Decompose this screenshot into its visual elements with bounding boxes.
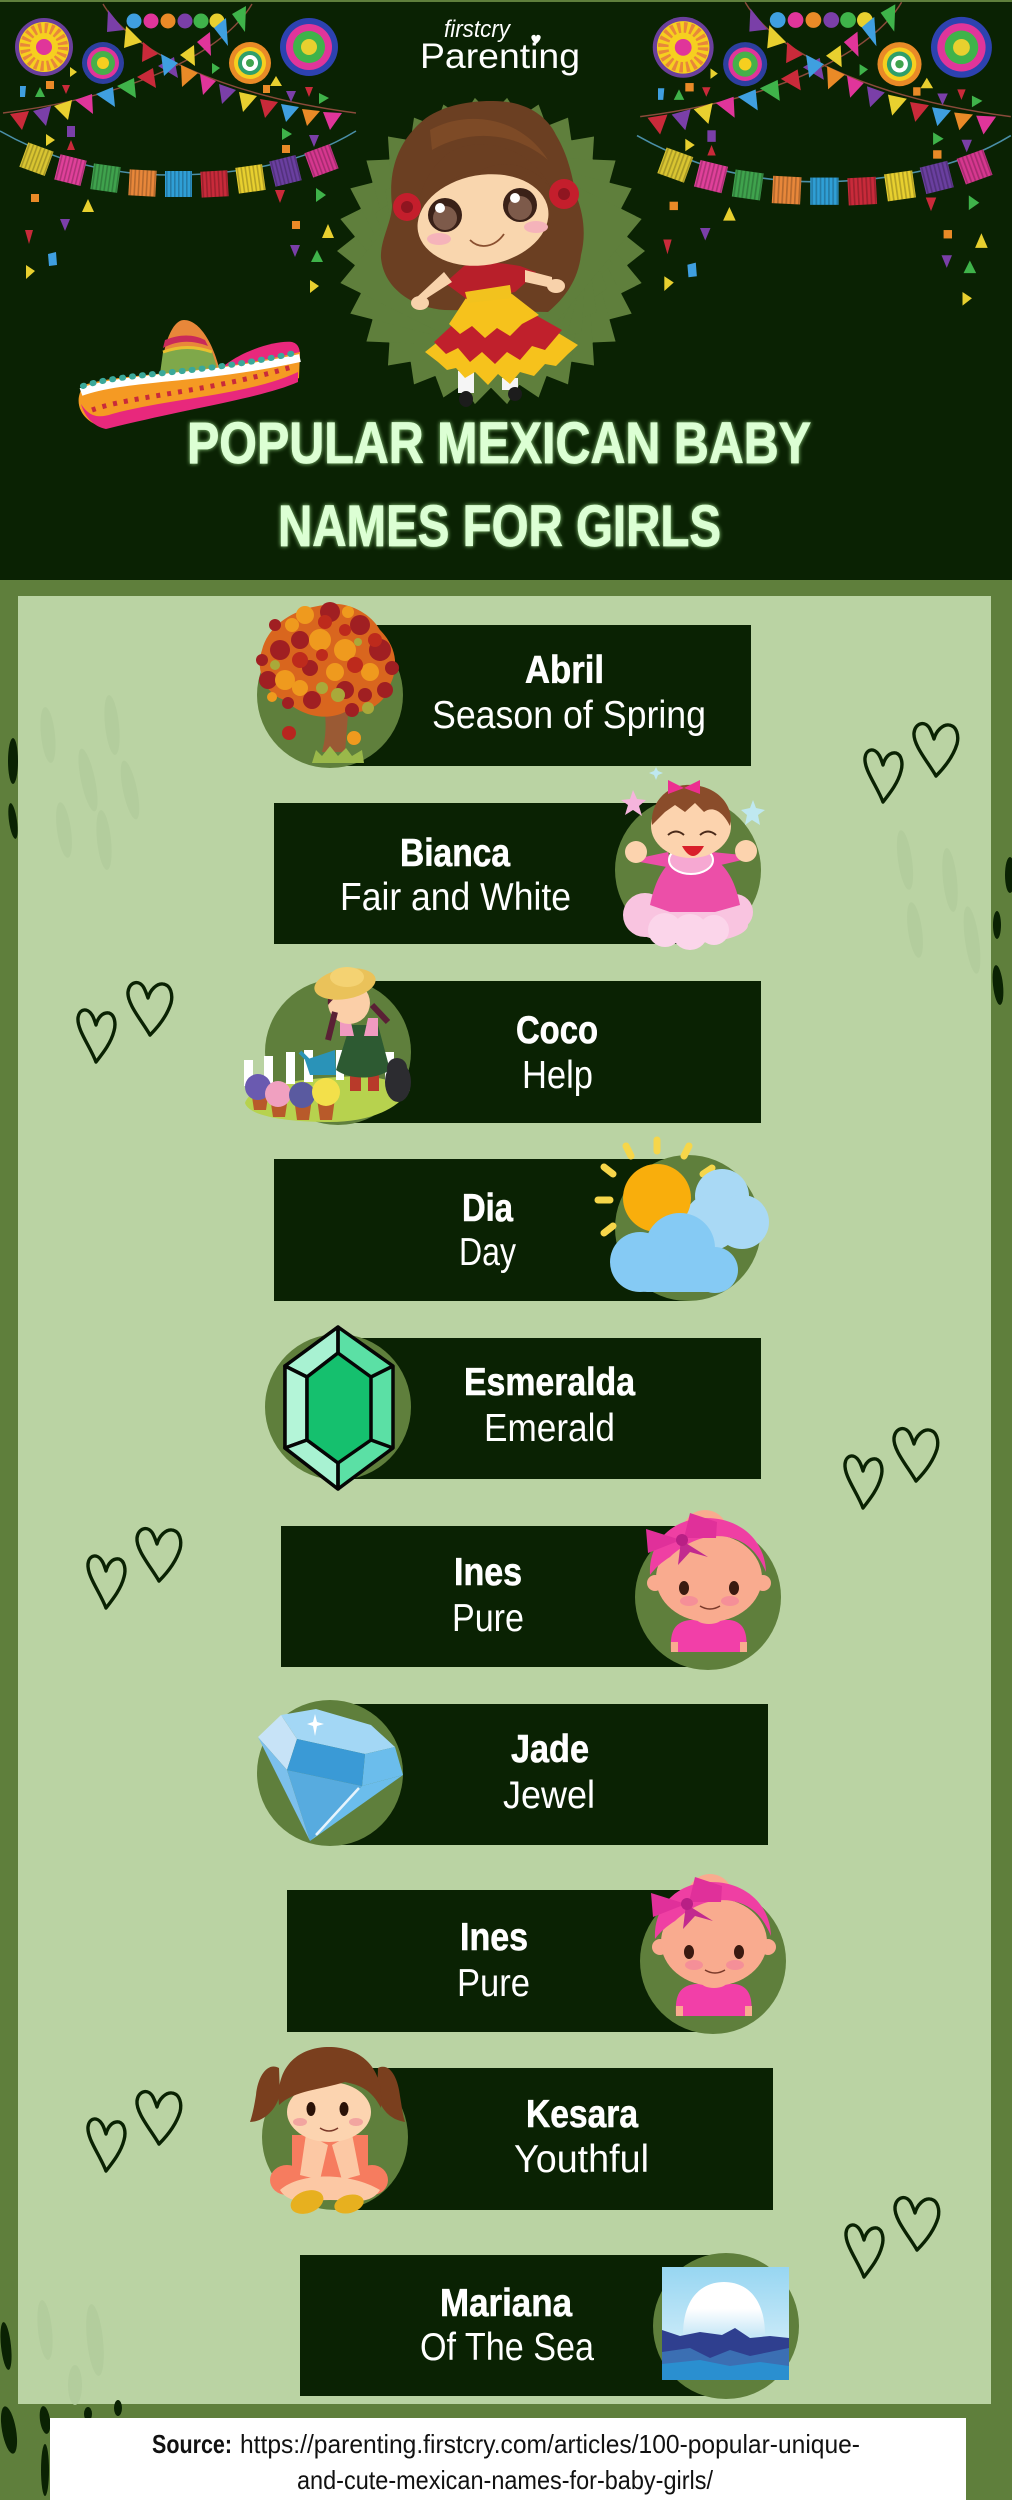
hearts xyxy=(846,2225,883,2277)
meaning text: Pure xyxy=(457,1962,530,2005)
hearts xyxy=(88,2119,125,2171)
meaning text: Day xyxy=(459,1231,516,1274)
papel picado xyxy=(19,142,339,198)
icon: sun and clouds xyxy=(598,1140,769,1293)
row 10: Mariana xyxy=(300,2253,799,2399)
row 6: Ines xyxy=(281,1510,781,1670)
header panel xyxy=(0,2,1012,580)
logo: Parenting xyxy=(420,37,580,76)
meaning text: Youthful xyxy=(514,2138,649,2181)
meaning text: Fair and White xyxy=(340,876,571,919)
logo xyxy=(420,16,580,76)
icon: moon over sea xyxy=(662,2267,789,2380)
hearts xyxy=(895,2198,939,2250)
name text: Dia xyxy=(462,1187,513,1230)
meaning text: Of The Sea xyxy=(420,2326,594,2369)
icon: blue jewel xyxy=(258,1709,403,1841)
icon: baby on pink cloud xyxy=(621,767,765,950)
hearts xyxy=(894,1429,938,1481)
title: NAMES FOR GIRLS xyxy=(278,494,721,559)
bunting flags, string 2 xyxy=(107,10,124,32)
bunting flags, string 1 xyxy=(10,111,29,130)
row 1: Abril xyxy=(256,602,751,768)
hearts xyxy=(137,1529,181,1581)
decorative strokes xyxy=(35,694,984,2405)
meaning text: Help xyxy=(522,1054,593,1097)
festive decoration: right xyxy=(637,2,1011,306)
icon: girl gardening xyxy=(244,964,411,1122)
hearts xyxy=(78,1010,115,1062)
icon: autumn tree xyxy=(256,602,399,763)
title: POPULAR MEXICAN BABY xyxy=(187,411,811,476)
starburst badge xyxy=(295,55,687,447)
illustration: girl in Mexican dress xyxy=(381,101,584,407)
festive decoration: left xyxy=(0,4,356,293)
confetti xyxy=(20,86,26,97)
hearts xyxy=(845,1456,882,1508)
hearts xyxy=(137,2092,181,2144)
title xyxy=(187,411,811,559)
source box: https://parenting.firstcry.com/articles/100-popular-unique- xyxy=(240,2429,860,2459)
meaning text: Emerald xyxy=(484,1407,615,1450)
source box xyxy=(50,2418,966,2500)
meaning text: Season of Spring xyxy=(432,694,706,737)
meaning text: Pure xyxy=(452,1597,524,1640)
row 3: Coco xyxy=(244,964,761,1125)
row 4: Dia xyxy=(274,1140,769,1301)
icon: baby with pink bow xyxy=(651,1874,776,2016)
row 9: Kesara xyxy=(250,2047,773,2218)
icon: sitting girl xyxy=(250,2047,405,2218)
source box: and-cute-mexican-names-for-baby-girls/ xyxy=(297,2465,714,2495)
hearts xyxy=(865,724,958,802)
name text: Abril xyxy=(525,649,604,692)
name text: Jade xyxy=(511,1728,589,1771)
name text: Coco xyxy=(516,1009,598,1052)
logo: firstcry xyxy=(444,16,512,43)
row 5: Esmeralda xyxy=(265,1327,761,1489)
beads xyxy=(126,14,142,28)
hearts xyxy=(88,1556,125,1608)
meaning text: Jewel xyxy=(503,1774,595,1817)
row 7: Jade xyxy=(257,1700,768,1846)
source box: Source: xyxy=(152,2429,232,2459)
name text: Esmeralda xyxy=(464,1361,635,1404)
main light green panel xyxy=(18,596,991,2404)
name text: Kesara xyxy=(526,2093,638,2136)
row 2: Bianca xyxy=(274,767,765,950)
rosettes xyxy=(15,18,73,76)
name text: Ines xyxy=(460,1916,528,1959)
hearts xyxy=(128,983,172,1035)
name text: Bianca xyxy=(400,832,510,875)
icon: emerald xyxy=(285,1327,393,1489)
name text: Ines xyxy=(454,1551,522,1594)
icon: baby with pink bow xyxy=(646,1510,771,1652)
strings xyxy=(3,4,356,113)
row 8: Ines xyxy=(287,1874,786,2034)
name text: Mariana xyxy=(440,2282,572,2325)
illustration: sombrero xyxy=(79,320,300,429)
skirt tiers xyxy=(425,325,578,385)
